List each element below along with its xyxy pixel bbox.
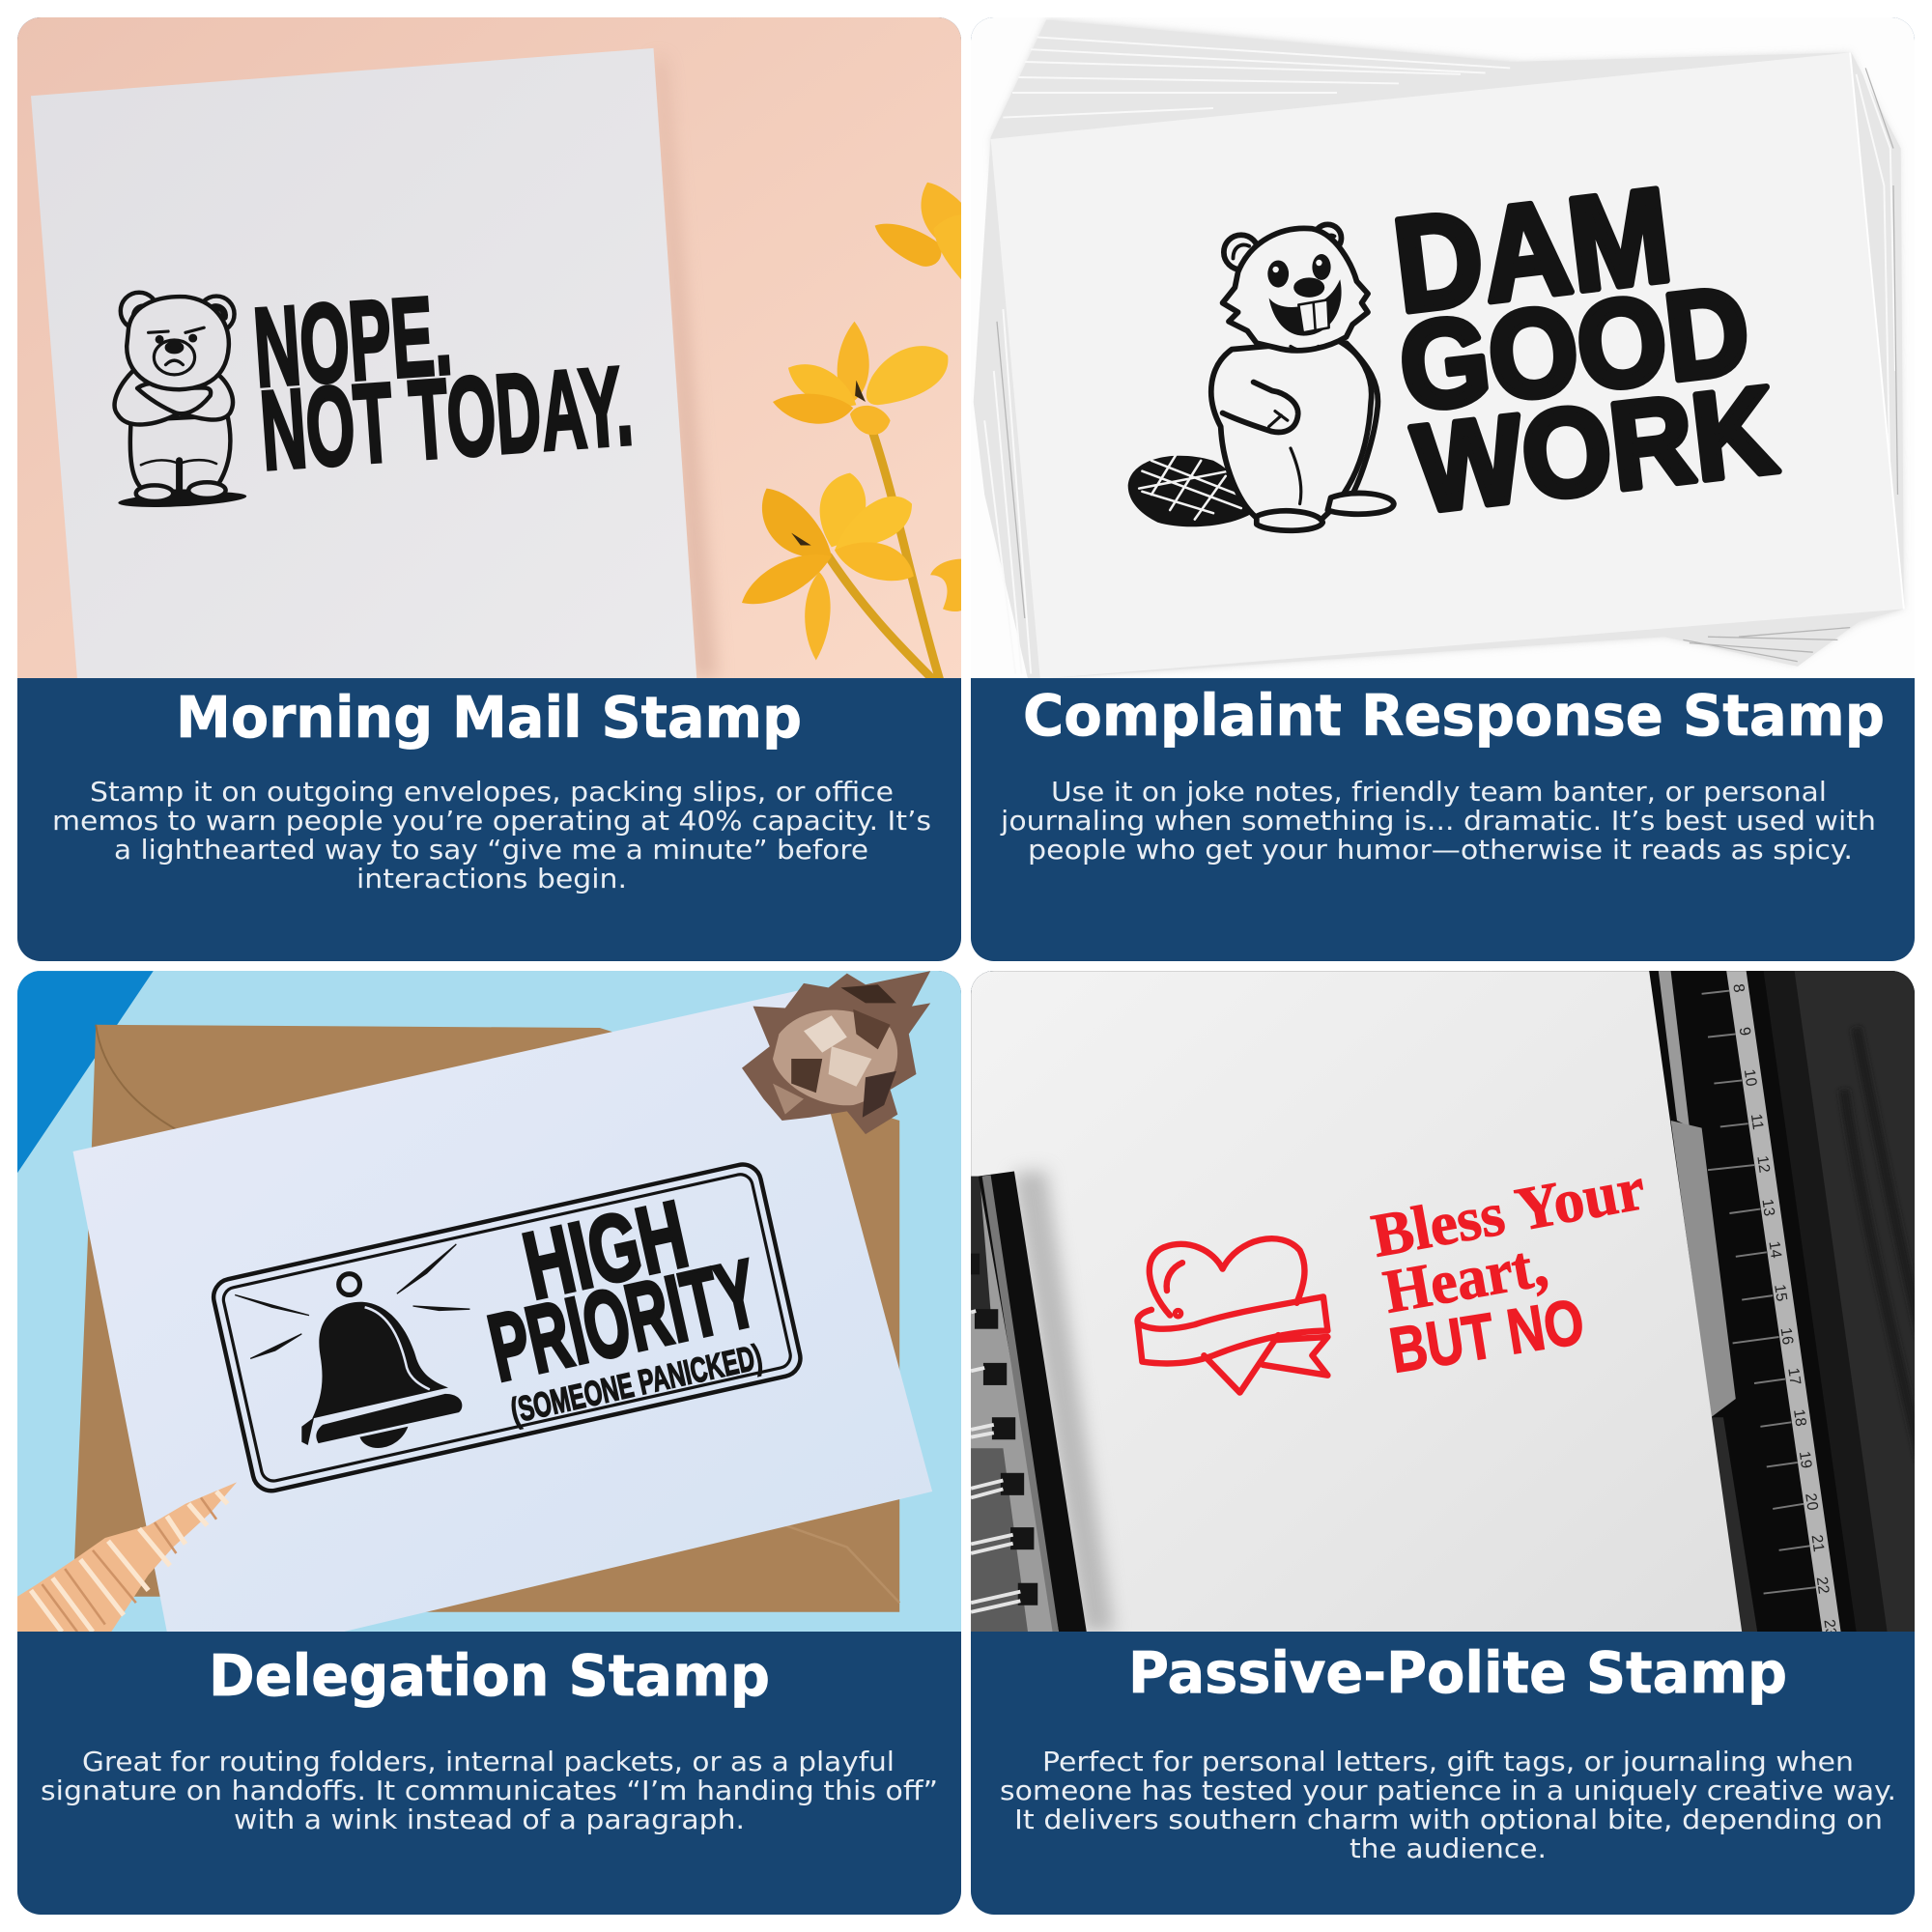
stamp text: heart: Heart, (1378, 1230, 1552, 1326)
stamp text: high priority (487, 1200, 763, 1430)
panel: delegation stamp (17, 971, 961, 1915)
stamp: bear and nope text (115, 271, 637, 510)
description: delegation stamp: Great for routing folders, internal packets, or as a playful (82, 1746, 895, 1777)
ruler numbers: 11 (1747, 1113, 1766, 1131)
stamp text: high priority: PRIORITY (480, 1239, 767, 1402)
ruler numbers (1729, 982, 1839, 1637)
photo: paper on pink background with yellow flowers (17, 17, 971, 684)
description: complaint response stamp: people who get your humor—otherwise it reads as spicy. (1028, 834, 1853, 866)
panel: passive-polite stamp (971, 971, 1921, 1915)
stamp text: high priority: (SOMEONE PANICKED) (507, 1336, 765, 1431)
title: complaint response stamp: Complaint Response Stamp (1023, 682, 1885, 749)
icon: smiling beaver (1128, 224, 1394, 530)
icon: spiral shell bottom left (17, 1482, 237, 1632)
description: passive-polite stamp: someone has tested your patience in a uniquely creative way. (1000, 1775, 1896, 1806)
stamp text: work: WORK (1407, 360, 1783, 539)
photo: stack of white cards (971, 17, 1915, 684)
description: complaint response stamp (1000, 776, 1876, 866)
description: passive-polite stamp (1000, 1746, 1896, 1864)
description: passive-polite stamp: It delivers southern charm with optional bite, depending on (1014, 1804, 1883, 1835)
ruler numbers: 19 (1796, 1450, 1814, 1469)
description: morning mail stamp (52, 776, 931, 895)
description: delegation stamp (41, 1746, 938, 1835)
description: morning mail stamp: Stamp it on outgoing envelopes, packing slips, or office (90, 776, 894, 808)
icon: spiky shell top right (742, 971, 930, 1134)
title: delegation stamp: Delegation Stamp (209, 1642, 770, 1709)
stamp border (210, 1161, 804, 1494)
panel: complaint response stamp (971, 17, 1915, 961)
ruler numbers: 15 (1771, 1283, 1789, 1303)
photo: notebook page with ruler on dark wood (971, 971, 1921, 1637)
ruler numbers: 21 (1808, 1534, 1827, 1553)
ruler numbers: 16 (1777, 1326, 1796, 1346)
icon: ringing bell (235, 1244, 469, 1448)
description: delegation stamp: signature on handoffs. It communicates “I’m handing this off” (41, 1775, 938, 1806)
ruler numbers: 13 (1758, 1198, 1777, 1217)
ruler numbers: 20 (1802, 1492, 1820, 1512)
panel: morning mail stamp (17, 17, 971, 961)
stamp text: but no: BUT NO (1385, 1285, 1589, 1386)
description: morning mail stamp: a lighthearted way to say “give me a minute” before (114, 834, 868, 866)
title: passive-polite stamp: Passive-Polite Stamp (1128, 1639, 1787, 1706)
stamp text: not today: NOT TODAY. (257, 342, 637, 494)
stamp: bless your heart but no (1138, 1153, 1650, 1393)
description: passive-polite stamp: the audience. (1350, 1833, 1547, 1864)
notebook spiral and pen (971, 1171, 1087, 1632)
ruler numbers: 12 (1753, 1154, 1773, 1174)
description: morning mail stamp: interactions begin. (356, 863, 627, 895)
stamp text: high priority: HIGH (515, 1180, 696, 1320)
ruler numbers: 22 (1813, 1576, 1832, 1595)
stamp: beaver and dam good work text (1128, 160, 1783, 539)
description: passive-polite stamp: Perfect for personal letters, gift tags, or journaling when (1042, 1746, 1854, 1777)
stamp text: nope: NOPE. (250, 271, 455, 411)
ruler numbers: 10 (1741, 1068, 1759, 1088)
icon: grumpy bear (115, 293, 247, 510)
description: complaint response stamp: Use it on joke notes, friendly team banter, or personal (1051, 776, 1827, 808)
stamp text: dam: DAM (1386, 160, 1679, 341)
ruler numbers: 18 (1790, 1408, 1808, 1428)
description: morning mail stamp: memos to warn people you’re operating at 40% capacity. It’s (52, 805, 931, 837)
description: delegation stamp: with a wink instead of a paragraph. (234, 1804, 745, 1835)
ruler numbers: 23 (1820, 1618, 1839, 1637)
ruler numbers: 17 (1784, 1367, 1804, 1386)
stamp: high priority with bell (210, 1161, 804, 1494)
title: morning mail stamp: Morning Mail Stamp (176, 684, 802, 751)
ruler numbers: 14 (1765, 1240, 1784, 1260)
description: complaint response stamp: journaling when something is... dramatic. It’s best used with (1000, 805, 1876, 837)
photo: card on kraft envelope with shells (17, 971, 961, 1637)
stamp text: good: GOOD (1393, 261, 1756, 438)
stamp text: bless your: Bless Your (1367, 1153, 1650, 1270)
icon: heart with ribbon (1138, 1238, 1327, 1393)
ruler numbers: 9 (1736, 1026, 1753, 1037)
ruler numbers: 8 (1729, 982, 1747, 994)
